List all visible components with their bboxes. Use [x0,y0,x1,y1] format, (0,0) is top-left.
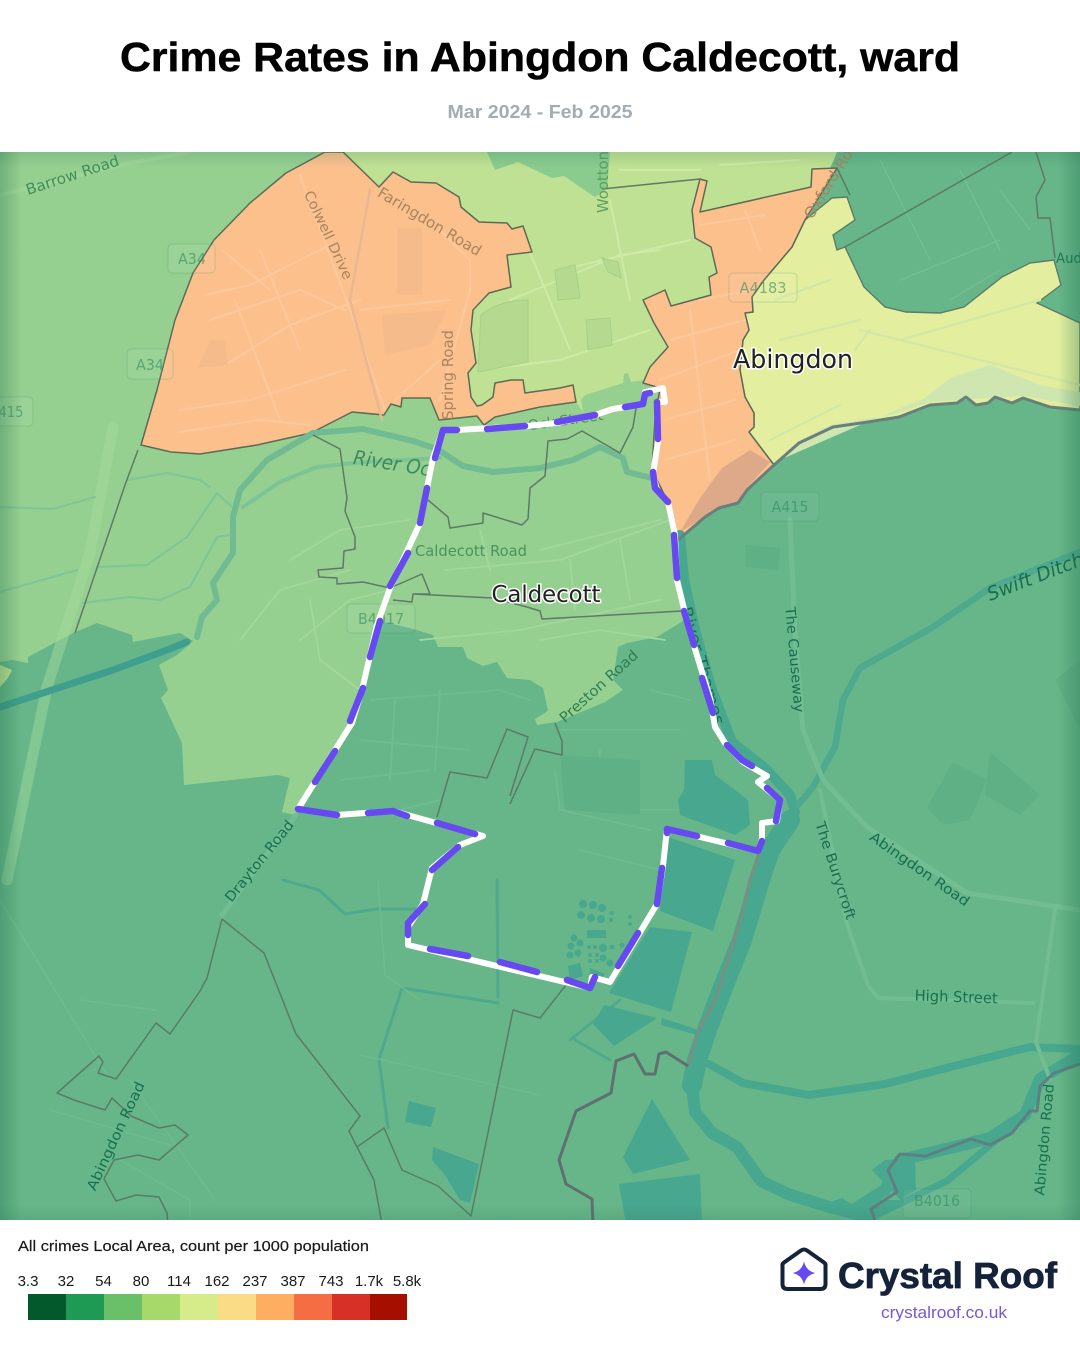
region: pale yellow east [740,197,1080,465]
label: Abingdon Road north: Abingdon Road [866,829,972,910]
badge: A4183: A4183 [740,279,786,297]
region: small sliver west [0,665,12,687]
logo icon: house with star [782,1250,826,1289]
road: Barrow Road [0,152,190,195]
water: south east blob [830,1158,916,1222]
legend scale labels: 54 [95,1273,112,1290]
label: Wootton: Wootton [594,151,612,213]
label: Colwell Drive: Colwell Drive [300,188,355,282]
legend scale labels: 3.3 [18,1273,38,1290]
label: High Street: High Street [914,987,998,1007]
streets in east dark top [880,160,1030,300]
road: minor southern roads [0,880,540,1224]
label: The Burycroft: The Burycroft [811,819,858,922]
label: Preston Road: Preston Road [557,648,642,726]
map edge shading [0,152,1080,1220]
legend scale labels: 1.7k [355,1273,384,1290]
legend scale labels: 743 [318,1273,344,1290]
dark patches in west orange area [224,362,228,366]
logo wordmark: Crystal Roof [838,1255,1058,1296]
badge: B4017: B4017 [358,610,404,628]
place label: Abingdon: Abingdon [733,345,853,375]
railway and streets in yellow area [770,280,1080,440]
label: River Oc: River Oc [352,445,432,481]
roads in north light-green area [480,160,800,370]
label: Caldecott Road: Caldecott Road [415,542,527,560]
ward outline: Abingdon Caldecott [298,388,780,988]
label: Faringdon Road: Faringdon Road [374,184,485,260]
badge: B4016: B4016 [914,1192,960,1210]
park patches in north area [478,258,621,372]
roads in central orange area [660,210,765,480]
legend scale labels: 237 [242,1273,268,1290]
sewage works tanks [566,900,632,982]
label: The Causeway: The Causeway [781,605,807,713]
region: central orange area [643,168,837,540]
water: River Ock [197,429,652,637]
road badges [0,244,971,1218]
region: east dark top [830,152,1000,168]
road: A34 [2,635,70,886]
ward-area roads and streets [240,520,670,690]
badge: A34 north: A34 [178,250,206,268]
legend scale labels: 114 [167,1273,191,1290]
water: drains south [283,880,620,1128]
label: Abingdon Road south east: Abingdon Road [1032,1083,1058,1196]
roads in west orange area [180,175,470,432]
badge: A415 east: A415 [772,498,808,516]
label: Barrow Road: Barrow Road [24,152,121,199]
water: lakes near ward [405,760,750,1224]
region: north light-green area [344,152,837,412]
legend scale labels: 387 [280,1273,306,1290]
legend scale labels: 80 [133,1273,149,1290]
water: River Thames south [692,820,790,1085]
streets in dark southern part of ward [340,690,690,870]
water: eastern branch [709,1047,1080,1095]
label: Abingdon Road west: Abingdon Road [84,1079,149,1193]
road: The Causeway and Abingdon Road [790,520,1080,910]
label: Ock Street: Ock Street [527,408,605,434]
water: canal west [0,642,187,707]
water: River Ock second channel [243,458,440,507]
railway band in yellow area [775,365,1080,462]
label: Spring Road: Spring Road [439,330,457,420]
legend scale labels: 32 [58,1273,74,1290]
region: west mid-green area [0,152,683,815]
river strip in central orange area [680,450,770,532]
label: Drayton Road: Drayton Road [222,818,298,905]
legend title: All crimes Local Area, count per 1000 population [18,1239,369,1255]
water: River Thames north [680,535,795,812]
website url: crystalroof.co.uk [881,1304,1008,1322]
water: Swift Ditch [798,552,1080,805]
badge: A34 south: A34 [136,356,164,374]
label: Oxford Road: Oxford Road [800,129,867,222]
water: south east river [850,1055,1080,1212]
title: Crime Rates in Abingdon Caldecott, ward [120,34,960,80]
ward boundary lines (heavy, along rivers) [559,397,1080,1224]
dark park patches [565,758,640,811]
ward boundary lines (light grey) [57,152,1055,1224]
place label: Caldecott: Caldecott [492,582,600,608]
legend scale labels: 5.8k [393,1273,422,1290]
road: Drayton Road [222,815,296,915]
legend scale labels [18,1273,422,1290]
region: west orange area [141,152,576,454]
legend colour bar [28,1294,407,1320]
region: green wedge north [487,152,610,197]
water: river loop [692,1085,871,1218]
label: River Thames: River Thames [677,605,728,727]
road: The Burycroft and High Street [820,790,1055,1079]
water: south east channel [900,1131,1012,1205]
water: western streams [0,473,232,603]
legend scale labels: 162 [204,1273,230,1290]
subtitle: date range: Mar 2024 - Feb 2025 [448,101,632,122]
